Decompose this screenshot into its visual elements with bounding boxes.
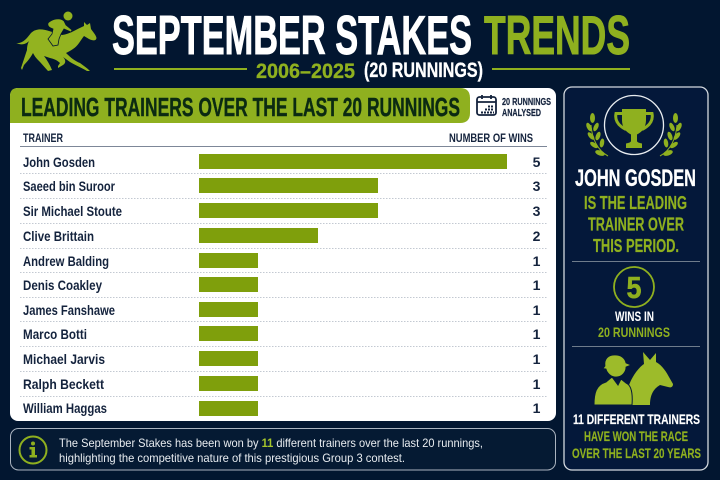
bar chart: wins by trainer: Ralph Beckett xyxy=(23,376,104,392)
leading trainer statement: TRAINER OVER xyxy=(588,214,684,234)
bar chart: wins by trainer: 1 xyxy=(533,326,541,342)
icon: info xyxy=(20,436,46,464)
icon: trainer and horse xyxy=(594,352,673,405)
stat: five wins: WINS IN xyxy=(615,308,654,324)
bar chart: wins by trainer: Michael Jarvis xyxy=(23,351,105,367)
bar chart: wins by trainer: William Haggas xyxy=(23,400,107,416)
subtitle: 2006–2025 xyxy=(256,60,355,83)
title: TRENDS xyxy=(484,4,630,66)
title: SEPTEMBER STAKES xyxy=(112,4,472,66)
bar chart: wins by trainer: 1 xyxy=(533,376,541,392)
table header: NUMBER OF WINS xyxy=(449,133,533,145)
bar chart: wins by trainer: James Fanshawe xyxy=(23,302,115,318)
stat: five wins xyxy=(598,267,670,340)
heading band xyxy=(10,88,470,123)
panel: leading trainers table xyxy=(10,88,556,421)
subtitle: (20 RUNNINGS) xyxy=(364,59,483,82)
bar chart: wins by trainer: Saeed bin Suroor xyxy=(23,178,115,194)
leading trainer statement: THIS PERIOD. xyxy=(593,236,679,256)
icon: trophy with laurels xyxy=(585,96,683,157)
heading band: LEADING TRAINERS OVER THE LAST 20 RUNNINGS xyxy=(21,92,460,122)
bar chart: wins by trainer: 1 xyxy=(533,302,541,318)
bar chart: wins by trainer: Sir Michael Stoute xyxy=(23,203,122,219)
bar chart: wins by trainer xyxy=(23,154,541,416)
bar chart: wins by trainer: Marco Botti xyxy=(23,326,87,342)
panel: leading trainer summary xyxy=(564,87,708,470)
runnings analysed note: 20 RUNNINGS xyxy=(502,97,551,108)
bar chart: wins by trainer: 3 xyxy=(533,178,541,194)
bar chart: wins by trainer: 2 xyxy=(533,228,541,244)
bar chart: wins by trainer: 1 xyxy=(533,400,541,416)
trainers statement xyxy=(572,411,701,461)
bar chart: wins by trainer: 1 xyxy=(533,277,541,293)
bar chart: wins by trainer: John Gosden xyxy=(23,154,95,170)
note text: The September Stakes has been won by 11 different trainers over the last 20 runnings, xyxy=(59,436,483,450)
note text: highlighting the competitive nature of this prestigious Group 3 contest. xyxy=(59,451,405,465)
bar chart: wins by trainer: Andrew Balding xyxy=(23,253,109,269)
callout: summary note xyxy=(10,428,556,470)
bar chart: wins by trainer: 5 xyxy=(533,154,541,170)
table header: TRAINER xyxy=(23,133,64,145)
bar chart: wins by trainer: 3 xyxy=(533,203,541,219)
icon: calendar xyxy=(477,95,496,115)
icon: horse and jockey xyxy=(16,12,96,71)
bar chart: wins by trainer: Clive Brittain xyxy=(23,228,94,244)
stat: five wins: 5 xyxy=(626,270,642,305)
note text xyxy=(59,436,483,465)
bar chart: wins by trainer: 1 xyxy=(533,253,541,269)
runnings analysed note xyxy=(502,97,551,119)
leading trainer statement xyxy=(584,193,687,256)
bar chart: wins by trainer: Denis Coakley xyxy=(23,277,102,293)
subtitle xyxy=(114,59,630,83)
runnings analysed note: ANALYSED xyxy=(502,108,541,119)
stat: five wins: 20 RUNNINGS xyxy=(598,324,670,340)
table header xyxy=(20,133,547,147)
bar chart: wins by trainer: 1 xyxy=(533,351,541,367)
